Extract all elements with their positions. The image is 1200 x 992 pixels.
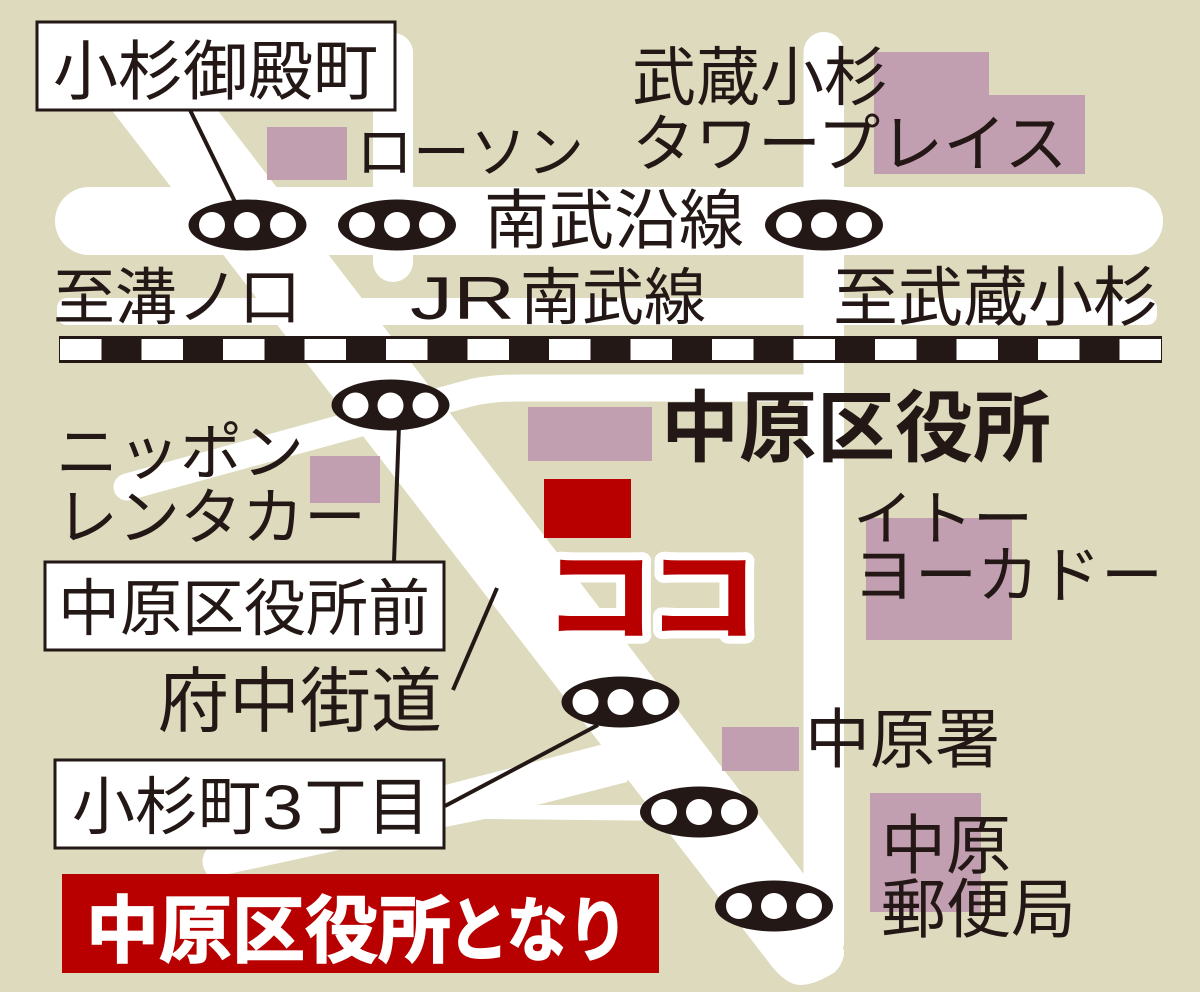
signal: bottom [715, 880, 833, 932]
building: Lawson [267, 127, 347, 180]
building: Musashi-Kosugi Tower Place [874, 52, 1085, 174]
text: Nippon Rent-A-Car: レンタカー [56, 484, 366, 553]
banner: next to Nakahara Ward Office: となり [448, 892, 628, 970]
text: Ito-Yokado [853, 486, 1163, 611]
destination marker [544, 479, 631, 538]
text: JR Nambu line: 南武線 [520, 264, 706, 333]
label box: 小杉御殿町: 小杉御殿町 [53, 35, 378, 108]
label box: 小杉町3丁目: 3 [262, 773, 303, 843]
railway line [59, 336, 1162, 363]
text: Ito-Yokado: ヨーカドー [853, 542, 1163, 611]
label box: 小杉町3丁目: 丁目 [304, 773, 430, 843]
building: Ito-Yokado [866, 518, 1012, 640]
signal: top right [765, 200, 883, 250]
text: Nambu-ensen road: 南武沿線 [484, 184, 744, 257]
text: Musashi-Kosugi Tower Place: 武蔵小杉 [632, 42, 888, 114]
text: Nakahara Ward Office: 中原区役所 [661, 384, 1051, 472]
label box: 小杉町3丁目: 小杉町 [72, 773, 261, 843]
text: JR Nambu line [410, 264, 706, 333]
connector lines [190, 110, 598, 806]
text: to Musashi-Kosugi: 至武蔵小杉 [833, 261, 1158, 334]
text: here: ココ [543, 540, 759, 655]
text: here: ココ [543, 540, 759, 655]
text: Nakahara post office [881, 809, 1076, 946]
text: Nippon Rent-A-Car [56, 419, 366, 553]
label box: 小杉町3丁目 [55, 760, 444, 848]
text: Nakahara post office: 郵便局 [881, 873, 1076, 946]
text: Lawson: ローソン [356, 121, 584, 185]
text: Nakahara post office: 中原 [881, 809, 1011, 882]
building: Nakahara police [722, 727, 799, 771]
label box: 中原区役所前: 中原区役所前 [58, 575, 430, 644]
signal: Kosugi-machi 3-chome [562, 676, 680, 728]
signal: lower [640, 786, 758, 838]
text: to Mizonokuchi: 至溝ノ口 [53, 264, 301, 333]
building: Nakahara Ward Office [528, 407, 652, 461]
banner: next to Nakahara Ward Office: 中原区役所 [86, 891, 451, 972]
text: Ito-Yokado: イトー [853, 486, 1033, 553]
banner: next to Nakahara Ward Office [62, 874, 659, 973]
signal: top middle [338, 200, 456, 250]
signal: ward office front [332, 380, 450, 430]
text: Fuchu Kaido: 府中街道 [158, 663, 442, 742]
text: Musashi-Kosugi Tower Place: タワープレイス [632, 110, 1067, 180]
text: JR Nambu line: JR [410, 265, 515, 332]
text: Nippon Rent-A-Car: ニッポン [56, 419, 304, 488]
text: Musashi-Kosugi Tower Place [632, 42, 1067, 180]
building: Nakahara post office [870, 793, 981, 912]
signal: top left [188, 200, 306, 250]
text: Nakahara police: 中原署 [805, 703, 1000, 776]
building: Nippon Rent-A-Car [310, 456, 380, 503]
